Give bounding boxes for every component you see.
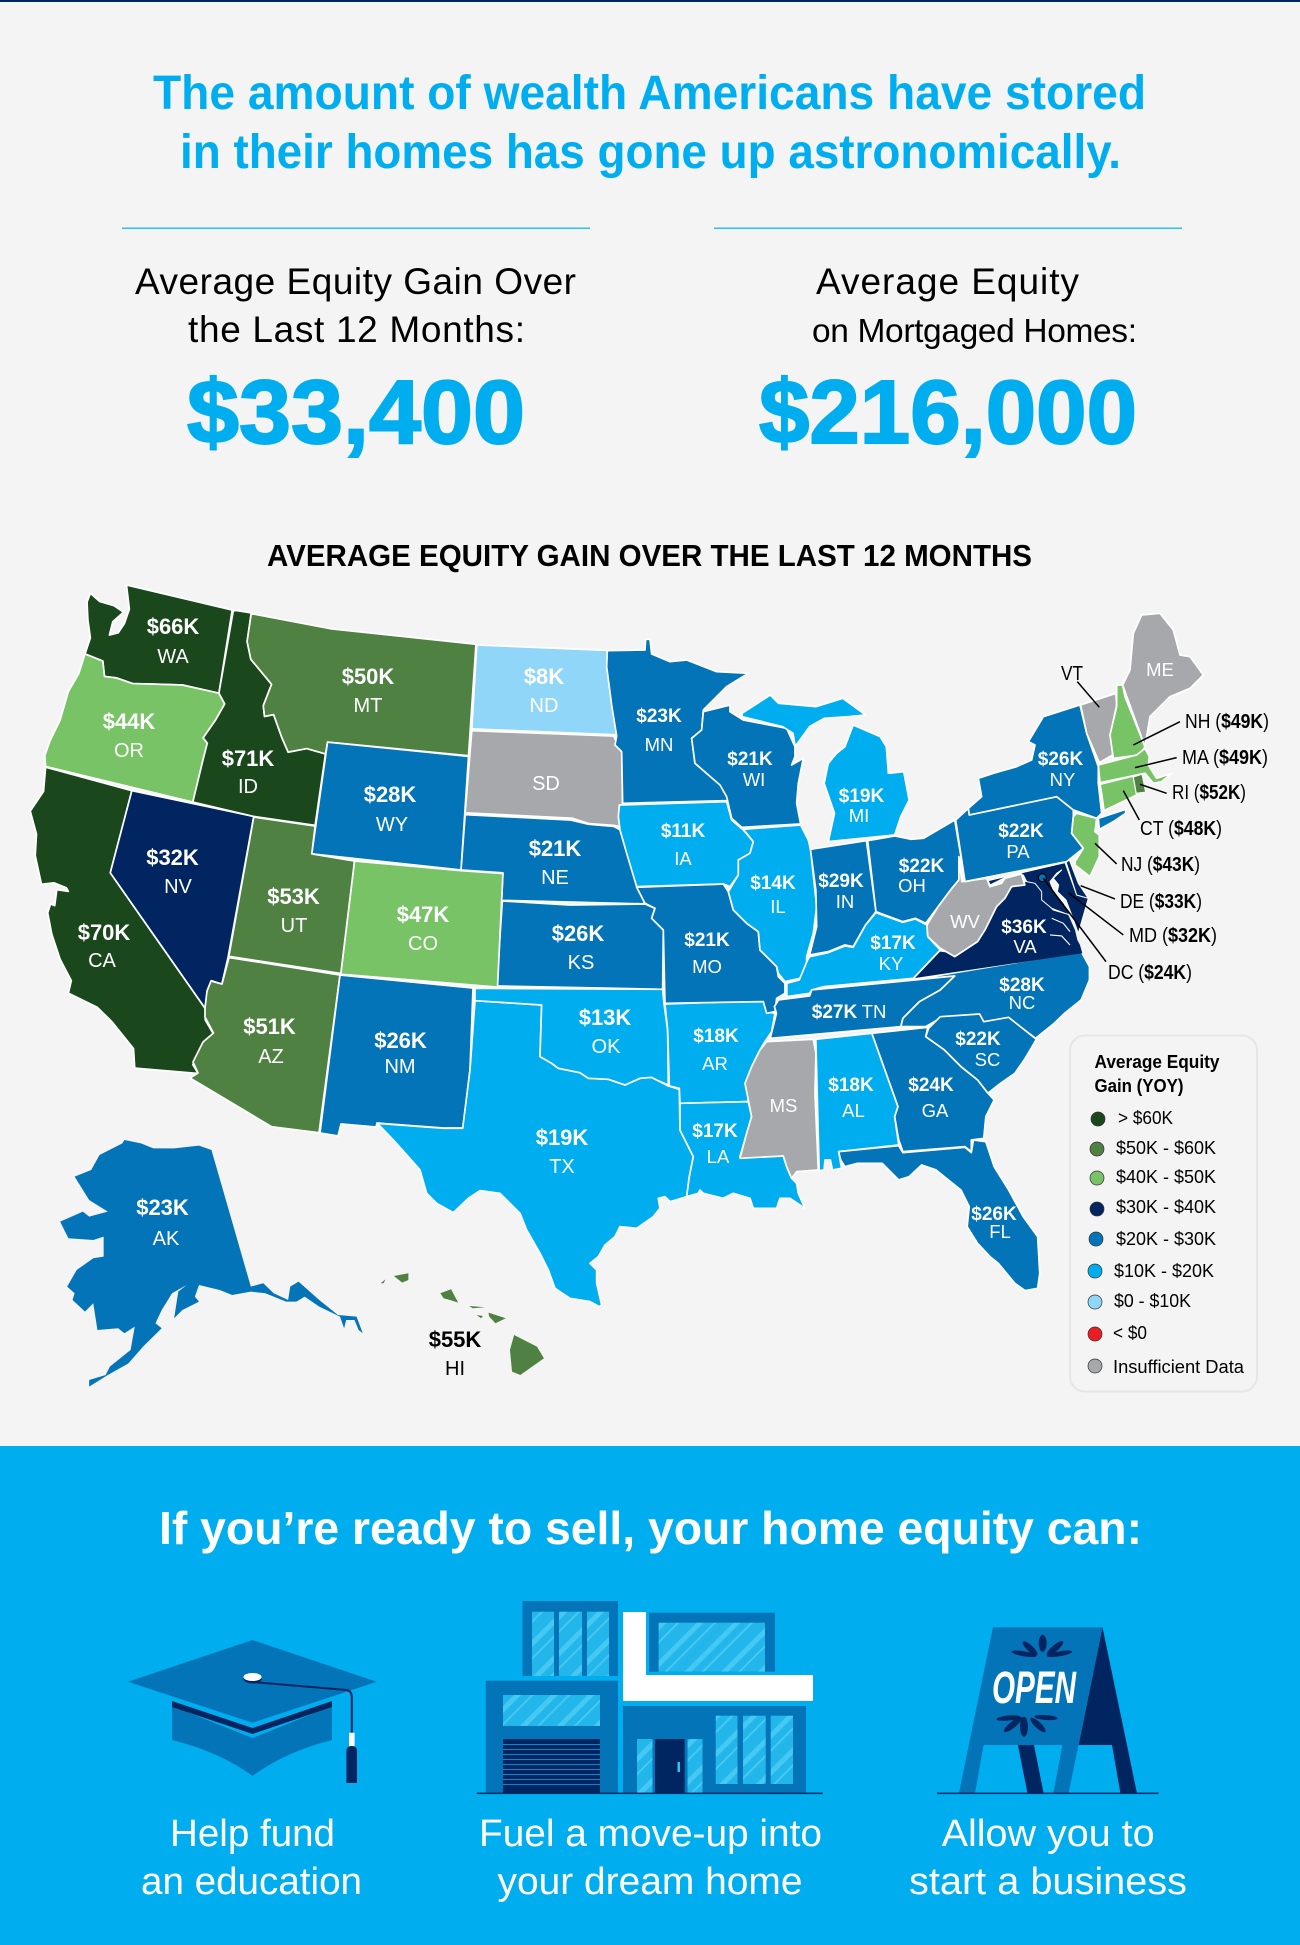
state: MS: MS (770, 1095, 797, 1116)
stat: average equity on mortgaged homes (714, 228, 1182, 463)
state: VA: $36K (1001, 917, 1047, 938)
state: AK: AK (153, 1228, 180, 1250)
state: MO (637, 884, 785, 1013)
state: NE: $21K (529, 836, 581, 861)
state: TN: $27K (812, 1002, 857, 1023)
icon: open sign (937, 1627, 1159, 1794)
caption: start a business: Allow you to (942, 1813, 1155, 1855)
state: TX (377, 1001, 693, 1307)
state: MA (1098, 748, 1172, 783)
state: KY: KY (879, 953, 903, 974)
state: CA (30, 767, 214, 1074)
map: US states (30, 585, 1203, 1387)
state: AR (665, 1001, 775, 1103)
state: NV: $32K (146, 845, 199, 870)
state: HI (381, 1273, 544, 1380)
callout: CT (1123, 791, 1222, 840)
state: IL (728, 825, 817, 982)
legend item: 40K to 50K: $40K - $50K (1116, 1167, 1216, 1187)
state: KY: $17K (870, 933, 916, 954)
state: AK (60, 1140, 363, 1387)
state: HI: $55K (429, 1327, 481, 1352)
callout: MD (1068, 893, 1217, 947)
state: NY: NY (1050, 769, 1075, 790)
panel: if you're ready to sell (0, 1446, 1300, 1945)
state: IN: IN (836, 891, 854, 912)
state: SD (465, 731, 623, 827)
state: OH: $22K (899, 856, 944, 877)
state: MN: MN (645, 734, 673, 755)
state: IA: $11K (661, 821, 705, 842)
state: TX: TX (549, 1156, 575, 1178)
state: TX: $19K (536, 1125, 588, 1150)
state: AR: AR (702, 1053, 728, 1074)
state: AZ: $51K (243, 1014, 296, 1039)
legend item: 10K to 20K: $10K - $20K (1114, 1261, 1214, 1281)
state: PA: $22K (998, 821, 1044, 842)
callout: RI: RI ($52K) (1172, 782, 1246, 804)
state: ID (193, 610, 325, 825)
callout: MA: MA ($49K) (1182, 747, 1268, 769)
legend item: 30K to 40K: $30K - $40K (1116, 1197, 1216, 1217)
state: KS: $26K (552, 921, 604, 946)
state: NC (901, 952, 1089, 1038)
callouts: northeast state labels (1043, 663, 1269, 984)
caption: move-up home (479, 1813, 822, 1903)
state: PA (956, 797, 1083, 882)
state: KS: KS (568, 952, 594, 974)
stat: average equity gain: $33,400 (187, 363, 525, 463)
state: NH (1110, 685, 1145, 758)
state: ND: $8K (524, 664, 564, 689)
state: NC: $28K (999, 975, 1045, 996)
stat: average equity on mortgaged homes: $216,000 (759, 363, 1137, 463)
panel: header (122, 67, 1182, 463)
state: WI: $21K (727, 749, 773, 770)
state: GA: GA (922, 1100, 949, 1121)
stat: average equity gain (122, 228, 590, 463)
state: NM: $26K (374, 1028, 427, 1053)
state: NV: NV (164, 876, 193, 898)
state: MT (247, 614, 476, 756)
callout: CT: CT ($48K) (1140, 818, 1222, 840)
stat: average equity on mortgaged homes: Average Equity (816, 261, 1080, 302)
callout: MD: MD ($32K) (1129, 925, 1217, 947)
state: CA: $70K (78, 920, 130, 945)
title: The amount of wealth Americans have stored (153, 67, 1146, 120)
caption: start a business: start a business (909, 1861, 1187, 1903)
legend item: 20K to 30K: $20K - $30K (1116, 1229, 1216, 1249)
state: TN: TN (862, 1001, 886, 1022)
state: ME (1123, 613, 1203, 747)
state: NM (320, 975, 473, 1136)
state: MI: $19K (839, 786, 884, 807)
state: MI: MI (849, 805, 869, 826)
state: WI: WI (743, 769, 765, 790)
stat: average equity gain: Average Equity Gain Over (135, 261, 576, 302)
state: OR: OR (114, 740, 144, 762)
legend item: 0 to 10K: $0 - $10K (1114, 1291, 1191, 1311)
callout: DE: DE ($33K) (1120, 891, 1202, 913)
legend item: over 60K: > $60K (1118, 1108, 1173, 1128)
state: MD (988, 863, 1088, 933)
state: UT: UT (281, 915, 307, 937)
state: FL (839, 1140, 1040, 1291)
state: WY: $28K (364, 782, 416, 807)
state: IA: IA (674, 848, 692, 869)
stat: average equity gain: the Last 12 Months: (188, 309, 525, 350)
callout: DE (1081, 886, 1202, 913)
state: OK (475, 988, 668, 1085)
callout: DC (1043, 878, 1192, 984)
map heading: AVERAGE EQUITY GAIN OVER THE LAST 12 MONTHS (267, 538, 1032, 573)
state: FL: FL (989, 1221, 1011, 1242)
state: NV (110, 791, 254, 1009)
state: SD: SD (532, 773, 560, 795)
state: OK: OK (592, 1036, 621, 1058)
state: IA (618, 802, 753, 887)
title (153, 67, 1146, 179)
state: OR (45, 654, 225, 802)
state: KS (497, 901, 663, 989)
state: OH (868, 820, 961, 923)
state: DE (1066, 860, 1088, 898)
callout: NH: NH ($49K) (1185, 711, 1269, 733)
state: OR: $44K (103, 709, 155, 734)
state: AR: $18K (693, 1026, 739, 1047)
state: FL: $26K (971, 1204, 1017, 1225)
state: HI: HI (445, 1358, 465, 1380)
title: in their homes has gone up astronomically. (180, 126, 1121, 179)
state: IN: $29K (818, 871, 864, 892)
state: MO: $21K (684, 930, 730, 951)
state: CT (1100, 776, 1137, 811)
state: MN: $23K (636, 706, 682, 727)
state: CO (341, 861, 503, 987)
state: WV: WV (950, 911, 981, 932)
legend item: over 60K (1091, 1108, 1173, 1128)
state: KY (787, 913, 940, 997)
state: AL (816, 1033, 899, 1171)
state: NJ (1072, 813, 1099, 877)
legend item: insufficient data: Insufficient Data (1113, 1357, 1245, 1377)
state: AL: AL (842, 1100, 865, 1121)
icon: graduation cap (128, 1640, 377, 1783)
state: TN (770, 976, 955, 1038)
state: MT: MT (354, 695, 382, 717)
legend item: 50K to 60K: $50K - $60K (1116, 1138, 1216, 1158)
state: IN (810, 841, 876, 955)
state: LA (680, 1102, 805, 1208)
state: NM: NM (384, 1056, 416, 1078)
caption: start a business (909, 1813, 1187, 1903)
state: WI (692, 705, 803, 827)
callout: NJ (1095, 843, 1200, 876)
caption: move-up home: your dream home (498, 1861, 802, 1903)
legend item: under 0: < $0 (1113, 1323, 1147, 1343)
state: VA (915, 882, 1082, 978)
callout: DC: DC ($24K) (1108, 962, 1192, 984)
state: LA: LA (707, 1146, 730, 1167)
state: SC: SC (975, 1049, 1000, 1070)
callout: RI (1140, 782, 1246, 804)
state: IL: $14K (750, 873, 796, 894)
state: AK: $23K (136, 1195, 189, 1220)
state: WA (85, 585, 232, 693)
caption: education: Help fund (170, 1813, 335, 1855)
state: NE: NE (541, 867, 569, 889)
state: LA: $17K (692, 1121, 738, 1142)
state: WA: $66K (147, 614, 199, 639)
state: ND: ND (530, 695, 558, 717)
legend: Gain (YOY) (1094, 1076, 1184, 1096)
state: ME: ME (1146, 659, 1174, 680)
state: MI (742, 695, 909, 842)
state: OK: $13K (579, 1005, 631, 1030)
callout: VT: VT (1061, 663, 1083, 685)
caption: education (141, 1813, 362, 1903)
state: WY: WY (376, 814, 408, 836)
state: ID: ID (238, 776, 258, 798)
state: GA (872, 1027, 994, 1152)
callout: NJ: NJ ($43K) (1121, 854, 1200, 876)
state: ID: $71K (222, 746, 274, 771)
callout: NH (1133, 711, 1269, 745)
state: MT: $50K (342, 664, 394, 689)
section heading: If you’re ready to sell, your home equity can: (159, 1502, 1142, 1554)
state: AZ: AZ (258, 1046, 284, 1068)
icon: open sign: OPEN (992, 1662, 1077, 1713)
state: WA: WA (157, 646, 189, 668)
state: WV (927, 857, 1025, 957)
callout: VT (1061, 663, 1099, 707)
legend (1070, 1036, 1257, 1392)
state: SC (926, 1014, 1036, 1093)
state: VT (1081, 693, 1117, 763)
legend: Average Equity (1094, 1052, 1220, 1072)
state: NY (968, 705, 1126, 829)
state: RI (1134, 775, 1145, 793)
state: MO: MO (692, 956, 722, 977)
state: ND (472, 645, 620, 735)
state: CO: CO (408, 933, 438, 955)
state: VA: VA (1013, 936, 1037, 957)
state: NC: NC (1009, 992, 1035, 1013)
stat: average equity on mortgaged homes: on Mortgaged Homes: (812, 313, 1137, 350)
state: CO: $47K (397, 902, 449, 927)
state: IL: IL (770, 896, 786, 917)
state: SC: $22K (955, 1029, 1001, 1050)
state: PA: PA (1006, 841, 1030, 862)
caption: education: an education (141, 1861, 362, 1903)
state: NE (461, 815, 645, 904)
state: CA: CA (88, 950, 117, 972)
state: GA: $24K (908, 1075, 954, 1096)
state: UT (229, 817, 354, 974)
state: MS (740, 1039, 818, 1178)
caption: move-up home: Fuel a move-up into (479, 1813, 822, 1855)
state: OH: OH (898, 875, 926, 896)
state: NY: $26K (1038, 749, 1083, 770)
legend item: under 0 (1088, 1323, 1147, 1343)
state: AL: $18K (828, 1075, 874, 1096)
icon: building (477, 1601, 823, 1794)
state: MN (607, 639, 748, 803)
state: AZ (190, 958, 340, 1133)
state: WY (312, 742, 468, 870)
callout: MA (1135, 747, 1268, 769)
state: UT: $53K (267, 884, 320, 909)
state: DC marker (1038, 874, 1046, 882)
